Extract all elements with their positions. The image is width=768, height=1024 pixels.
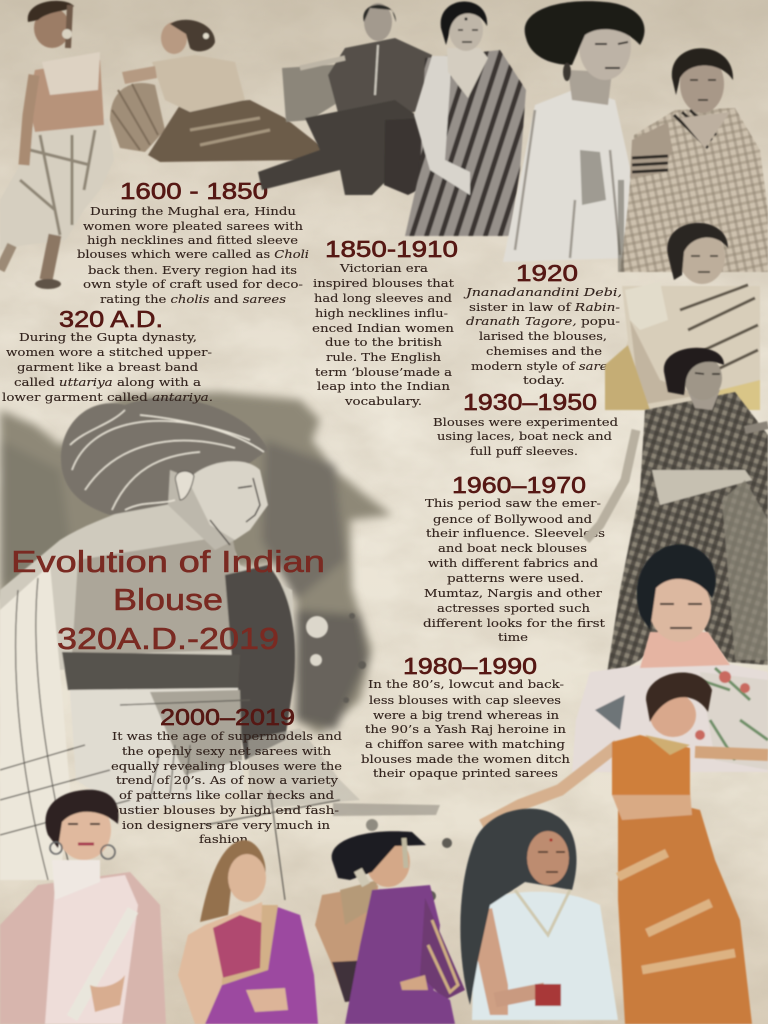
ink illustration: woman seen from the back xyxy=(0,392,452,901)
paragraph: their influence. Sleeveless xyxy=(426,526,605,540)
paragraph xyxy=(464,285,622,387)
heading: 1600 - 1850 xyxy=(120,178,268,204)
title: Evolution of Indian xyxy=(11,544,325,579)
paragraph: vocabulary. xyxy=(344,394,422,408)
paragraph: full puff sleeves. xyxy=(470,444,578,458)
paragraph xyxy=(423,496,605,644)
paragraph: women wore pleated sarees with xyxy=(83,219,304,233)
paragraph: blouses which were called as Choli xyxy=(77,247,309,261)
paragraph: own style of craft used for deco- xyxy=(83,277,303,291)
paragraph: their opaque printed sarees xyxy=(373,766,558,780)
hair strands xyxy=(70,410,264,510)
paragraph: Victorian era xyxy=(339,261,428,275)
paragraph: garment like a breast band xyxy=(17,360,199,374)
paragraph xyxy=(433,415,619,458)
text: 1930-1950 xyxy=(433,389,619,458)
title: Blouse xyxy=(113,582,223,617)
paragraph: rating the cholis and sarees xyxy=(100,292,286,306)
dark band xyxy=(62,652,240,690)
paragraph: During the Gupta dynasty, xyxy=(19,330,197,344)
paragraph: modern style of sarees xyxy=(471,359,622,373)
face xyxy=(188,461,268,540)
paragraph: leap into the Indian xyxy=(317,379,451,393)
paragraph: chemises and the xyxy=(486,344,602,358)
paragraph: Jnanadanandini Debi, xyxy=(464,285,622,299)
title: 320A.D.-2019 xyxy=(57,621,279,656)
paragraph: It was the age of supermodels and xyxy=(112,729,343,743)
photo: reclining woman, 1600-1850 xyxy=(110,20,332,162)
paragraph: high necklines and fitted sleeve xyxy=(87,233,298,247)
heading: 320 A.D. xyxy=(59,306,163,332)
paragraph: and boat neck blouses xyxy=(438,541,587,555)
paragraph: high necklines influ- xyxy=(315,306,448,320)
paragraph: the 90’s a Yash Raj heroine in xyxy=(365,722,567,736)
paragraph: Blouses were experimented xyxy=(433,415,619,429)
heading: 1920 xyxy=(516,260,578,286)
paragraph xyxy=(110,729,343,846)
heading: 1980–1990 xyxy=(403,653,537,679)
paragraph: bustier blouses by high end fash- xyxy=(110,803,339,817)
text: 1980-1990 xyxy=(361,653,571,780)
paragraph xyxy=(2,330,213,404)
facial lines xyxy=(210,478,260,545)
paragraph: the openly sexy net sarees with xyxy=(122,744,332,758)
heading: 1960–1970 xyxy=(452,472,586,498)
saree strip xyxy=(0,565,70,880)
photo: woman in purple sari xyxy=(178,840,318,1024)
photo: woman in checked saree xyxy=(618,48,768,272)
paragraph: blouses made the women ditch xyxy=(361,752,571,766)
sketch lines xyxy=(0,578,340,900)
photo: woman in dark checked saree, 1930-1950 xyxy=(586,348,768,680)
photo: woman in pale pink saree, 2000-2019 xyxy=(0,790,166,1024)
paragraph xyxy=(77,204,309,306)
paragraph: with different fabrics and xyxy=(428,556,599,570)
paragraph: ion designers are very much in xyxy=(122,818,331,832)
paragraph: inspired blouses that xyxy=(313,276,454,290)
text: 1960-1970 xyxy=(423,472,605,644)
paragraph: dranath Tagore, popu- xyxy=(466,314,620,328)
paragraph: today. xyxy=(523,373,565,387)
photo: woman, 1920 xyxy=(605,223,760,410)
paragraph: actresses sported such xyxy=(437,601,591,615)
heading: 2000–2019 xyxy=(160,704,295,730)
paragraph: different looks for the first xyxy=(423,616,605,630)
sleeve xyxy=(225,565,295,760)
paragraph: larised the blouses, xyxy=(479,329,607,343)
paragraph: lower garment called antariya. xyxy=(2,390,213,404)
neck xyxy=(168,470,235,550)
heading: 1930–1950 xyxy=(463,389,597,415)
paragraph: of patterns like collar necks and xyxy=(119,788,335,802)
photo: woman in orange saree, 1980-1990 xyxy=(482,672,768,1024)
hair xyxy=(61,398,268,515)
paragraph: a chiffon saree with matching xyxy=(365,737,566,751)
paragraph: sister in law of Rabin- xyxy=(469,300,620,314)
photo: woman in floral blouse, 1960-1970 xyxy=(572,544,768,772)
paragraph: This period saw the emer- xyxy=(425,496,601,510)
text: 1600-1850 xyxy=(77,178,309,306)
paragraph xyxy=(361,677,571,780)
paragraph: women wore a stitched upper- xyxy=(6,345,212,359)
splatter xyxy=(306,616,328,638)
ear xyxy=(175,471,194,500)
paragraph: had long sleeves and xyxy=(314,291,453,305)
photo: woman in white saree xyxy=(460,809,618,1020)
ink brush stroke xyxy=(333,803,440,816)
paragraph: rule. The English xyxy=(326,350,442,364)
paragraph: patterns were used. xyxy=(447,571,584,585)
text: 320 A.D. xyxy=(2,306,213,404)
paragraph: term ‘blouse’made a xyxy=(315,365,452,379)
paragraph: called uttariya along with a xyxy=(14,375,201,389)
paragraph xyxy=(312,261,455,408)
text: 1850-1910 xyxy=(312,236,458,408)
heading: 1850-1910 xyxy=(325,236,458,262)
paragraph: back then. Every region had its xyxy=(88,263,297,277)
photo: seated woman, 1850-1910 xyxy=(258,3,432,195)
paragraph: In the 80’s, lowcut and back- xyxy=(368,677,564,691)
lower back xyxy=(70,688,244,815)
paragraph: gence of Bollywood and xyxy=(433,512,593,526)
paragraph: fashion xyxy=(199,832,249,846)
text: 1920 xyxy=(464,260,622,387)
paragraph: were a big trend whereas in xyxy=(373,708,560,722)
paragraph: using laces, boat neck and xyxy=(437,429,613,443)
photo: woman in purple, back view xyxy=(315,831,465,1024)
photo: dancer, 320 A.D. xyxy=(0,1,114,289)
paragraph: trend of 20’s. As of now a variety xyxy=(116,773,339,787)
title xyxy=(11,544,325,656)
photo: standing woman in striped saree xyxy=(405,1,526,236)
paragraph: less blouses with cap sleeves xyxy=(369,693,561,707)
photo: woman in white blouse, 1900s xyxy=(503,1,645,262)
ink wash xyxy=(0,392,392,735)
text: 2000-2019 xyxy=(110,704,343,846)
paragraph: During the Mughal era, Hindu xyxy=(90,204,296,218)
paragraph: enced Indian women xyxy=(312,321,455,335)
shoulders and back xyxy=(0,490,295,670)
paragraph: due to the british xyxy=(325,335,443,349)
paragraph: Mumtaz, Nargis and other xyxy=(424,586,603,600)
paragraph: equally revealing blouses were the xyxy=(111,759,342,773)
paragraph: time xyxy=(498,630,528,644)
